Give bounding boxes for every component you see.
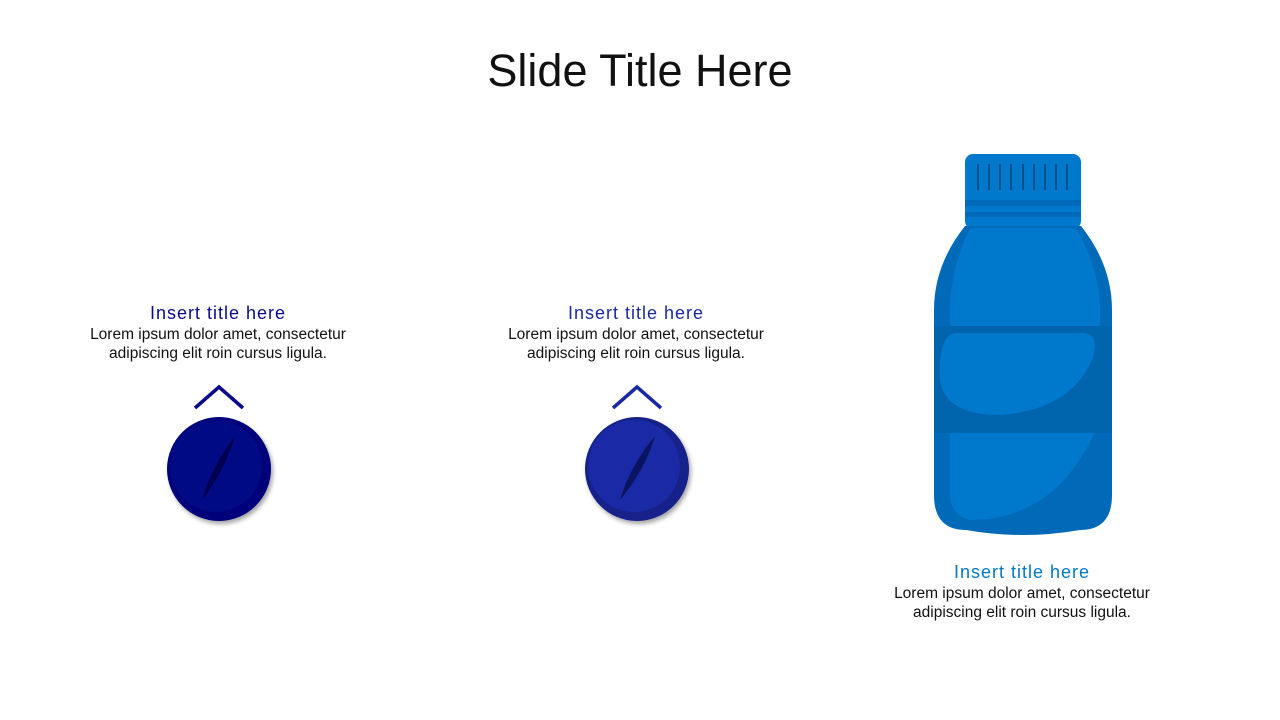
text block 1: Insert title here — [150, 303, 286, 323]
text block 3: Insert title here — [954, 562, 1090, 582]
text block 3: Lorem ipsum dolor amet, consectetur adipiscing elit roin cursus ligula. — [894, 585, 1150, 621]
text block 1 — [90, 303, 346, 362]
icon: bottle — [934, 154, 1112, 535]
icon: pill 2 — [585, 387, 689, 521]
text block 3 — [894, 562, 1150, 621]
text block 1: Lorem ipsum dolor amet, consectetur adipiscing elit roin cursus ligula. — [90, 326, 346, 362]
icon: pill 1 — [167, 387, 271, 521]
text block 2: Insert title here — [568, 303, 704, 323]
text block 2 — [508, 303, 764, 362]
title: Slide Title Here — [487, 45, 793, 96]
text block 2: Lorem ipsum dolor amet, consectetur adipiscing elit roin cursus ligula. — [508, 326, 764, 362]
